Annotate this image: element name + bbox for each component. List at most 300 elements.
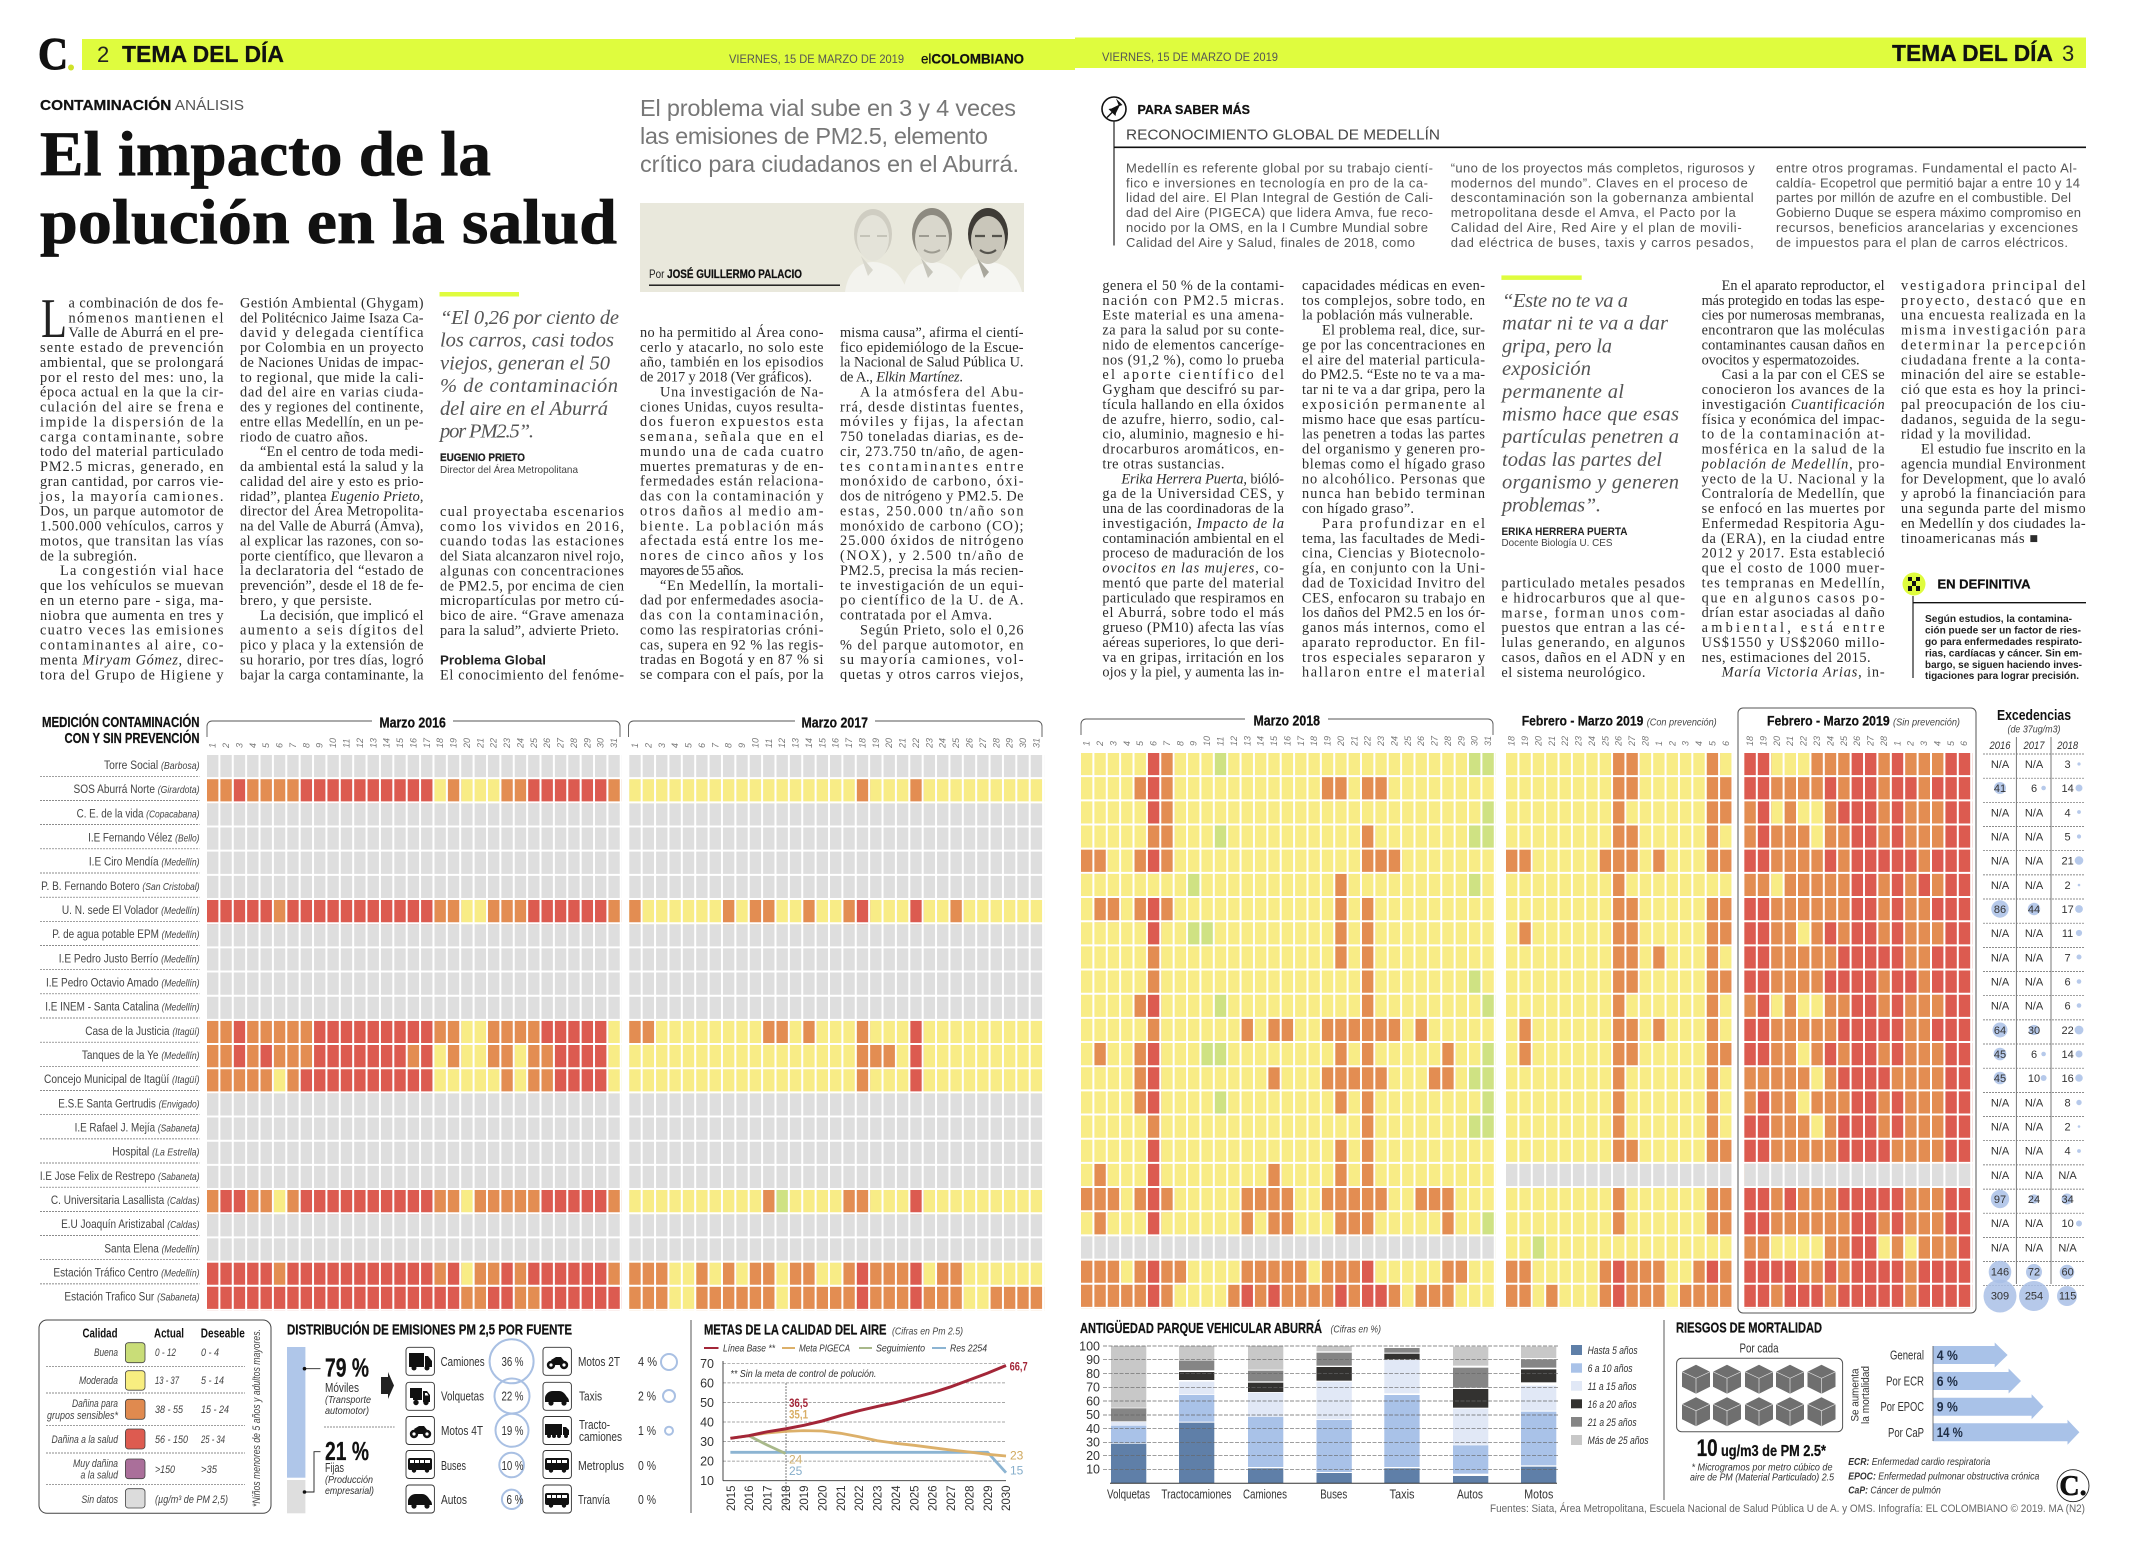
body column 1, right page: ga de la Universidad CES, y (1102, 486, 1285, 502)
body column 1, right page: investigación, Impacto de la (1102, 516, 1284, 532)
station labels: I.E Jose Felix de Restrepo (Sabaneta) (40, 1169, 200, 1183)
heatmap header: Marzo 2017: 27 (978, 737, 988, 749)
heatmap header: Marzo 2016: 26 (542, 738, 552, 749)
chart legend: Res 2254 (950, 1342, 987, 1354)
body column 4, left page: dad por enfermedades asocia- (640, 593, 824, 609)
body column 2, left page: des y regiones del continente, (240, 400, 424, 416)
heatmap header: Marzo 2018: 8 (1175, 741, 1185, 746)
excedencias table: N/A (2025, 807, 2044, 819)
body column 5, left page: monóxido de carbono (CO); (840, 518, 1024, 534)
body column 5, left page: fico epidemiólogo de la Escue- (840, 340, 1024, 356)
excedencias table: N/A (1991, 1146, 2010, 1158)
body column 5, right page: determinar la percepción (1901, 337, 2086, 353)
pull quote: Erika Herrera Puerta: Docente Biología U. CES (1502, 537, 1612, 549)
body column 1, left page: gran cantidad, por carros vie- (40, 474, 224, 490)
body column 2, left page: na del Valle de Aburrá (Amva), (240, 519, 424, 535)
body column 4, left page: como las respiratorias cróni- (640, 622, 824, 638)
panel: riesgos de mortalidad: RIESGOS DE MORTALIDAD (1676, 1320, 1822, 1336)
excedencias table: 2018 (2056, 740, 2079, 752)
panel: metas de la calidad del aire: 2024 (891, 1485, 903, 1511)
body column 5, right page: una encuesta realizada en la (1901, 308, 2086, 324)
body column 2, left page: pico y placa y la extensión de (240, 638, 424, 654)
excedencias table: N/A (2025, 952, 2044, 964)
excedencias table: 22 (2061, 1025, 2074, 1037)
body column 1, left page: Valle de Aburrá en el pre- (68, 325, 224, 341)
body column 5, right page: pal preocupación de los ciu- (1901, 397, 2086, 413)
station labels: Concejo Municipal de Itagüí (Itagüí) (44, 1072, 199, 1086)
panel: antigüedad parque vehicular: 20 (1086, 1449, 1100, 1463)
station labels: Estación Tráfico Centro (Medellín) (53, 1266, 199, 1280)
body column 2, right page: cina, Ciencias y Biotecnolo- (1302, 546, 1485, 562)
heatmap header: Marzo 2017: 8 (724, 743, 734, 748)
panel: antigüedad parque vehicular: 70 (1086, 1380, 1100, 1394)
pull quote: Eugenio Prieto: EUGENIO PRIETO (440, 452, 525, 464)
panel frame: Febrero - Marzo 2019 sin prevención: 6 (1959, 741, 1969, 746)
heatmap header: Marzo 2017: 14 (804, 738, 814, 748)
body column 2, right page: exposición permanente al (1302, 397, 1485, 413)
body column 2, left page: dad del aire en varias ciuda- (240, 385, 424, 401)
excedencias table: 44 (2028, 904, 2040, 916)
pull quote: Erika Herrera Puerta: matar ni te va a dar (1502, 313, 1669, 335)
heatmap header: Marzo 2016: 27 (556, 737, 566, 749)
body column 3, right page: e hidrocarburos que al que- (1501, 590, 1685, 606)
body column 2, right page: blemas como el hígado graso (1302, 456, 1485, 472)
heatmap header: Febrero - Marzo 2019 con prevención: 6 (1721, 741, 1731, 746)
excedencias table: N/A (2025, 1146, 2044, 1158)
panel: distribución de emisiones: Volquetas (441, 1390, 484, 1404)
arrows: mortality increase: 6 % (1937, 1373, 1958, 1389)
pull quote: Eugenio Prieto (438, 292, 619, 476)
body column 5, right page: El estudio fue inscrito en la (1921, 442, 2086, 458)
panel: distribución de emisiones: Motos 2T (578, 1355, 620, 1369)
body column 4, left page: año, también en los episodios (640, 355, 824, 371)
panel: metas de la calidad del aire: ** Sin la meta de control de polución. (730, 1368, 876, 1380)
heatmap header: Marzo 2017: 2 (643, 743, 653, 749)
arrows: mortality increase: Por ECR (1886, 1374, 1924, 1388)
body column 4, left page: otros daños al medio am- (640, 503, 824, 519)
heatmap: Febrero - Marzo 2019 sin prevención (1744, 753, 1972, 1311)
panel: metas de la calidad del aire: 40 (700, 1416, 714, 1430)
body column 3, right page: puestos que entran a las cé- (1501, 620, 1685, 636)
body column 4, left page: semana, señala que en el (640, 429, 824, 445)
panel: antigüedad parque vehicular: Buses (1320, 1488, 1347, 1502)
arrows: mortality increase: 4 % (1937, 1347, 1958, 1363)
body column 1, right page: tre otras sustancias. (1102, 456, 1224, 472)
body column 4, left page: “En Medellín, la mortali- (660, 578, 824, 594)
panel: distribución de emisiones: Taxis (579, 1390, 602, 1404)
body column 1, left page (39, 296, 224, 683)
body column 5, left page: dos de nitrógeno y PM2.5. De (840, 489, 1024, 505)
heatmap header: Marzo 2018: 27 (1430, 735, 1440, 747)
excedencias table: 41 (1994, 783, 2006, 795)
panel: metas de la calidad del aire: 2026 (928, 1485, 940, 1511)
panel frame: Febrero - Marzo 2019 sin prevención: 27 (1866, 735, 1876, 747)
heatmap header: Febrero - Marzo 2019 con prevención: 27 (1627, 735, 1637, 747)
panel: distribución de emisiones: Fijas (325, 1461, 344, 1475)
heatmap header: Marzo 2016: 15 (395, 737, 405, 748)
body column 1, right page: de azufre, hierro, sodio, cal- (1102, 412, 1284, 428)
excedencias table: N/A (2025, 880, 2044, 892)
headline: polución en la salud (40, 186, 617, 257)
pull quote: Erika Herrera Puerta: mismo hace que esas (1502, 404, 1679, 426)
panel: metas de la calidad del aire: 2020 (818, 1485, 830, 1511)
body column 2, left page: calidad del aire y esto es prio- (240, 474, 424, 490)
heatmap: Febrero - Marzo 2019 con prevención (1506, 753, 1734, 1311)
legend: calidad del aire: Muy dañina (73, 1458, 118, 1470)
heatmap header: Marzo 2017: 3 (657, 743, 667, 748)
panel frame: Febrero - Marzo 2019 sin prevención: 23 (1812, 736, 1822, 747)
body column 5, left page: la Nacional de Salud Pública U. (840, 355, 1024, 371)
body column 4, left page: nores de cinco años y los (640, 548, 824, 564)
body column 1, right page: ojos y la piel, y aumenta las in- (1102, 665, 1284, 681)
panel: distribución de emisiones: Tracto- (579, 1418, 610, 1432)
panel: distribución de emisiones: Metroplus (578, 1459, 624, 1473)
heatmap header: Marzo 2018: 21 (1349, 736, 1359, 747)
heatmap: Marzo 2016 (207, 755, 622, 1313)
heatmap header: Febrero - Marzo 2019 con prevención: 3 (1681, 741, 1691, 746)
body column 4, right page: María Victoria Arias, in- (1721, 665, 1885, 681)
heatmap header: Marzo 2017: 4 (670, 743, 680, 748)
panel: antigüedad parque vehicular: Autos (1457, 1488, 1483, 1502)
body column 1, right page: el aporte científico del (1102, 367, 1284, 383)
panel: distribución de emisiones: empresarial) (325, 1485, 374, 1497)
pull quote: Erika Herrera Puerta: exposición (1502, 358, 1591, 380)
body column 5, left page: su mayoría camiones, vol- (840, 652, 1024, 668)
excedencias table: 45 (1994, 1073, 2006, 1085)
body column 2, right page: hallaron entre el material (1302, 665, 1485, 681)
body column 3, left page: Problema Global (440, 653, 546, 668)
heatmap header: Marzo 2017: 10 (750, 738, 760, 748)
panel frame: Febrero - Marzo 2019 sin prevención: 21 (1785, 736, 1795, 747)
body column 2, left page (240, 296, 424, 683)
excedencias table: N/A (1991, 1170, 2010, 1182)
body column 1, left page: a combinación de dos fe- (68, 296, 224, 312)
panel: para saber más: fico e inversiones en tecnología en pro de la ca- (1126, 175, 1428, 190)
body column 5, right page: agencia mundial Environment (1901, 456, 2086, 472)
body column 4, right page: se enfocó en las muertes por (1702, 501, 1885, 517)
body column 2, right page: ge por las concentraciones en (1302, 337, 1485, 353)
body column 4, left page: no ha permitido al Área cono- (640, 324, 824, 341)
panel: riesgos de mortalidad: ug/m3 de PM 2.5* (1721, 1443, 1827, 1460)
excedencias table: 254 (2025, 1291, 2043, 1303)
body column 1, right page: el Aburrá, sobre todo el más (1102, 605, 1284, 621)
panel: distribución de emisiones: Móviles (325, 1381, 359, 1395)
heatmap header: Marzo 2016: 23 (502, 738, 512, 749)
excedencias table: 97 (1994, 1194, 2006, 1206)
body column 5, left page: (NOX), y 2.500 tn/año de (840, 548, 1024, 564)
excedencias table: N/A (1991, 1001, 2010, 1013)
header band: right page: TEMA DEL DÍA (1892, 39, 2053, 66)
excedencias table: N/A (2025, 856, 2044, 868)
heatmap header: Marzo 2018 (1081, 714, 1493, 747)
panel frame: Febrero - Marzo 2019 sin prevención: 25 (1839, 735, 1849, 747)
panel: antigüedad parque vehicular: Tractocamiones (1161, 1488, 1231, 1502)
heatmap header: Marzo 2016: 21 (475, 738, 485, 749)
body column 5, left page: A la atmósfera del Abu- (860, 384, 1024, 400)
header band: right page: 3 (2062, 41, 2074, 66)
panel: metas de la calidad del aire: 35,1 (789, 1408, 808, 1422)
body column 4, right page: mosférica en la salud de la (1702, 442, 1885, 458)
panel: antigüedad parque vehicular: Camiones (1243, 1488, 1287, 1502)
station labels: C. Universitaria Lasallista (Caldas) (51, 1193, 200, 1207)
heatmap header: Marzo 2017: 25 (951, 737, 961, 749)
panel: para saber más: caldía- Ecopetrol que permitió bajar a entre 10 y 14 (1776, 175, 2080, 190)
body column 5, left page: quetas y otros carros viejos, (840, 667, 1024, 683)
body column 1, left page: nómenos mantienen el (68, 310, 224, 326)
pull quote: Eugenio Prieto: viejos, generan el 50 (440, 352, 610, 374)
body column 2, left page: riodo de cuatro años. (240, 429, 368, 445)
excedencias table: N/A (2025, 832, 2044, 844)
heatmap header: Marzo 2017: 24 (938, 738, 948, 749)
heatmap header: Marzo 2016: 20 (462, 738, 472, 749)
panel: distribución de emisiones: Autos (441, 1493, 467, 1507)
body column 1, left page: 1.500.000 vehículos, carros y (40, 519, 224, 535)
body column 5, left page: po científico de la U. de A. (840, 593, 1024, 609)
heatmap header: Marzo 2017: 6 (697, 743, 707, 748)
panel: metas de la calidad del aire: 2029 (983, 1485, 995, 1511)
body column 1, right page: mentó que parte del material (1102, 575, 1284, 591)
heatmap header: Marzo 2017: 18 (857, 738, 867, 748)
legend: calidad del aire: 13 - 37 (155, 1375, 180, 1387)
body column 1, right page: grueso (PM10) afecta las vías (1102, 620, 1284, 636)
heatmap header: Marzo 2018: 16 (1282, 736, 1292, 746)
panel: antigüedad parque vehicular: 80 (1086, 1367, 1100, 1381)
separator between emissions and goals (690, 1320, 692, 1513)
station labels: P. B. Fernando Botero (San Cristobal) (41, 879, 200, 893)
station labels: Santa Elena (Medellín) (104, 1241, 200, 1255)
body column 3, left page (440, 504, 625, 684)
heatmap header: Febrero - Marzo 2019 con prevención: 5 (1707, 740, 1717, 746)
heatmap header: Marzo 2016: 22 (489, 738, 499, 749)
excedencias table: N/A (2025, 1218, 2044, 1230)
logo: circled C: C. (2059, 1471, 2087, 1502)
body column 4, right page: ambiental, está entre (1702, 620, 1885, 636)
legend: calidad del aire: Buena (94, 1347, 118, 1359)
bar chart legend: 11 a 15 años (1588, 1381, 1637, 1393)
body column 4, right page: investigación Cuantificación (1702, 397, 1885, 413)
panel: para saber más: RECONOCIMIENTO GLOBAL DE MEDELLÍN (1126, 126, 1440, 144)
body column 5, right page: y aprobó la financiación para (1901, 486, 2086, 502)
body column 4, right page: población de Medellín, pro- (1701, 456, 1885, 472)
panel: para saber más: Calidad del Aire, Red Aire y el plan de movili- (1451, 220, 1742, 235)
body column 2, right page: tar ni te va a dar gripa, pero la (1302, 382, 1486, 398)
body column 1, left page: cuatro veces las emisiones (40, 623, 224, 639)
panel: distribución de emisiones: automotor) (325, 1405, 369, 1417)
heatmap header: Febrero - Marzo 2019 con prevención: 28 (1640, 736, 1650, 747)
excedencias table: 34 (2061, 1194, 2074, 1206)
body column 4, right page: to de la contaminación at- (1702, 427, 1885, 443)
excedencias table: N/A (1991, 856, 2010, 868)
body column 1, right page: contaminación ambiental en el (1102, 531, 1284, 547)
heatmap header: Marzo 2018: 4 (1122, 741, 1132, 746)
body column 1, right page: nos (91,2 %), como lo prueba (1102, 352, 1285, 368)
body column 2, right page: tos complejos, sobre todo, en (1302, 293, 1485, 309)
body column 4, left page: Una investigación de Na- (660, 384, 824, 400)
panel: metas de la calidad del aire: 24 (789, 1452, 803, 1466)
heatmap header: Marzo 2016: 6 (275, 743, 285, 748)
body column 2, right page: gía, en conjunto con la Uni- (1302, 561, 1485, 577)
body column 1, left page: La congestión vial hace (60, 563, 224, 579)
body column 4, right page: encontraron que las moléculas (1702, 323, 1885, 339)
header band: right page: VIERNES, 15 DE MARZO DE 2019 (1102, 50, 1278, 64)
panel: metas de la calidad del aire: METAS DE LA CALIDAD DEL AIRE (704, 1322, 886, 1338)
subheadline: las emisiones de PM2.5, elemento (640, 123, 988, 149)
body column 2, left page: Gestión Ambiental (Ghygam) (240, 296, 424, 312)
body column 5, left page: rrá, desde distintas fuentes, (840, 399, 1024, 415)
body column 2, left page: brero, y que persiste. (240, 593, 372, 609)
heatmap header: Marzo 2016: 11 (342, 739, 352, 748)
body column 5, right page: tinoamericanas más ■ (1901, 531, 2038, 547)
excedencias table: 309 (1991, 1291, 2009, 1303)
panel: para saber más: modernos del mundo”. Claves en el proceso de (1451, 175, 1748, 190)
heatmap header: Marzo 2018: 5 (1135, 740, 1145, 746)
heatmap header: Marzo 2016: 25 (529, 737, 539, 749)
heatmap title: CON Y SIN PREVENCIÓN (64, 729, 200, 747)
body column 2, left page: por Colombia en un proyecto (240, 340, 424, 356)
excedencias table: N/A (1991, 832, 2010, 844)
panel: riesgos de mortalidad: CaP: Cáncer de pulmón (1848, 1484, 1941, 1496)
heatmap header: Marzo 2016: 4 (248, 743, 258, 748)
excedencias table: 4 (2065, 807, 2071, 819)
panel: riesgos de mortalidad: * Microgramos por metro cúbico de (1692, 1462, 1833, 1474)
heatmap header: Marzo 2018: Marzo 2018 (1253, 714, 1320, 730)
body column 1, left page: por el resto del mes: uno, la (40, 370, 224, 386)
panel: distribución de emisiones: 79 % (325, 1352, 369, 1382)
excedencias table: N/A (2025, 1001, 2044, 1013)
heatmap header: Marzo 2017: 5 (683, 742, 693, 748)
separator before mortality panel (1663, 1320, 1665, 1500)
heatmap header: Marzo 2018: 18 (1309, 736, 1319, 746)
icon: cubes of particulate matter (1682, 1365, 1836, 1426)
panel: antigüedad parque vehicular: 50 (1086, 1408, 1100, 1422)
body column 4, left page: tradas en Bogotá y en 87 % si (640, 652, 824, 668)
panel: para saber más: recursos, beneficios arancelarias y excenciones (1776, 220, 2078, 235)
heatmap header: Marzo 2016: 8 (301, 743, 311, 748)
heatmap header: Marzo 2017: 7 (710, 742, 720, 748)
heatmap header: Marzo 2018: 12 (1229, 736, 1239, 746)
panel: distribución de emisiones: 19 % (502, 1424, 524, 1438)
pull quote: Eugenio Prieto: los carros, casi todos (440, 330, 614, 352)
panel: metas de la calidad del aire: 36,5 (789, 1396, 808, 1410)
subheadline: El problema vial sube en 3 y 4 veces (640, 95, 1016, 121)
panel: antigüedad parque vehicular: 40 (1086, 1422, 1100, 1436)
body column 3, left page: cuando todas las estaciones (440, 534, 624, 550)
heatmap header: Marzo 2017: 9 (737, 743, 747, 748)
station labels (40, 758, 200, 1304)
legend: calidad del aire: Calidad (82, 1326, 118, 1340)
panel frame: Febrero - Marzo 2019 sin prevención: 22 (1799, 736, 1809, 747)
panel: antigüedad parque vehicular: 100 (1079, 1340, 1100, 1354)
heatmap header: Marzo 2018: 1 (1082, 741, 1092, 746)
panel: distribución de emisiones: 4 % (638, 1355, 657, 1369)
legend: calidad del aire: 5 - 14 (201, 1375, 224, 1387)
heatmap header: Marzo 2016: 24 (515, 738, 525, 749)
body column 2, right page: mismo hace que esas partícu- (1302, 412, 1485, 428)
body column 3, left page: para la salud”, advierte Prieto. (440, 623, 619, 639)
panel: distribución de emisiones: camiones (579, 1430, 622, 1444)
body column 4, right page: Contraloría de Medellín, que (1702, 486, 1885, 502)
station labels: E.U Joaquín Aristizabal (Caldas) (61, 1217, 200, 1231)
excedencias table: 11 (2062, 928, 2073, 940)
panel: riesgos de mortalidad: aire de PM (Material Particulado) 2.5 (1690, 1472, 1834, 1484)
panel: metas de la calidad del aire: 2017 (762, 1485, 774, 1511)
panel: metas de la calidad del aire: 2023 (872, 1485, 884, 1511)
station labels: Torre Social (Barbosa) (104, 758, 200, 772)
excedencias table: 6 (2031, 1049, 2037, 1061)
body column 5, right page: en Medellín y dos ciudades la- (1901, 516, 2086, 532)
pull quote: Erika Herrera Puerta: problemas”. (1500, 494, 1601, 516)
station labels: Tanques de la Ye (Medellín) (82, 1048, 200, 1062)
panel: antigüedad parque vehicular: 10 (1086, 1462, 1100, 1476)
body column 2, right page (1302, 278, 1486, 681)
panel: antigüedad parque vehicular: ANTIGÜEDAD PARQUE VEHICULAR ABURRÁ (1080, 1320, 1322, 1337)
body column 5, left page: 25.000 óxidos de nitrógeno (840, 533, 1024, 549)
body column 1, right page: particulado que respiramos en (1102, 590, 1284, 606)
subheadline (640, 95, 1019, 177)
excedencias table: N/A (2025, 976, 2044, 988)
body column 2, left page: to regional, que mide la cali- (240, 370, 424, 386)
station labels: I.E Ciro Mendía (Medellín) (89, 855, 200, 869)
bar chart legend: Hasta 5 años (1588, 1345, 1638, 1357)
body column 1, right page (1102, 278, 1285, 681)
excedencias table: 6 (2065, 976, 2071, 988)
panel frame: Febrero - Marzo 2019 sin prevención: 18 (1745, 736, 1755, 746)
excedencias table: 24 (2028, 1194, 2040, 1206)
excedencias table: N/A (2025, 1242, 2044, 1254)
heatmap title: MEDICIÓN CONTAMINACIÓN (42, 713, 200, 731)
author photo banner (640, 203, 1024, 292)
heatmap header: Febrero - Marzo 2019 con prevención: 4 (1694, 741, 1704, 746)
body column 3, left page: de PM2.5, por encima de cien (440, 578, 624, 594)
panel: distribución de emisiones: 6 % (506, 1493, 524, 1507)
panel: metas de la calidad del aire: 2015 (726, 1485, 738, 1511)
panel: riesgos de mortalidad: la mortalidad (1860, 1366, 1872, 1424)
body column 4, left page: biente. La población más (640, 518, 824, 534)
bar chart legend (1571, 1345, 1649, 1447)
heatmap header: Febrero - Marzo 2019 con prevención: Febrero - Marzo 2019 (Con prevención) (1522, 712, 1717, 728)
body column 5, left page (840, 325, 1024, 683)
body column 2, right page: las penetren a todas las partes (1302, 427, 1485, 443)
body column 5, right page: ciudadana frente a la conta- (1901, 352, 2086, 368)
body column 1, left page: Dos, un parque automotor de (40, 504, 224, 520)
excedencias table: 10 (2028, 1073, 2040, 1085)
heatmap header: Febrero - Marzo 2019 con prevención: 2 (1667, 741, 1677, 747)
excedencias table: 2017 (2023, 740, 2045, 752)
excedencias table: N/A (2025, 759, 2044, 771)
excedencias table: N/A (1991, 1122, 2010, 1134)
arrows: mortality increase (1880, 1342, 2079, 1445)
body column 4, left page: das con la contaminación, (640, 608, 824, 624)
header band: left page: VIERNES, 15 DE MARZO DE 2019 (729, 52, 904, 66)
body column 4, right page: drían estar asociadas al daño (1702, 605, 1885, 621)
bar chart legend: 6 a 10 años (1588, 1363, 1633, 1375)
body column 2, left page: al explicar las razones, con so- (240, 533, 424, 549)
legend: calidad del aire: Sin datos (81, 1494, 118, 1506)
heatmap header: Febrero - Marzo 2019 con prevención: 20 (1534, 736, 1544, 747)
panel: distribución de emisiones: 36 % (502, 1355, 524, 1369)
body column 4, left page: ciones Unidas, cuyos resulta- (640, 399, 824, 415)
chart legend: Línea Base ** (723, 1342, 776, 1354)
heatmap header: Marzo 2017: 20 (884, 738, 894, 749)
body column 2, left page: aumento a seis dígitos del (240, 623, 424, 639)
body column 1, left page: niobra que aumenta en tres y (40, 608, 224, 624)
body column 4, right page (1701, 278, 1885, 681)
body column 2, left page: porte científico, que llevaron a (240, 548, 424, 564)
heatmap header: Marzo 2017: 11 (764, 739, 774, 748)
heatmap header: Febrero - Marzo 2019 con prevención: 23 (1574, 736, 1584, 747)
panel: para saber más: dad eléctrica de buses, taxis y carros pesados, (1451, 235, 1754, 250)
heatmap header: Febrero - Marzo 2019 con prevención: 25 (1600, 735, 1610, 747)
